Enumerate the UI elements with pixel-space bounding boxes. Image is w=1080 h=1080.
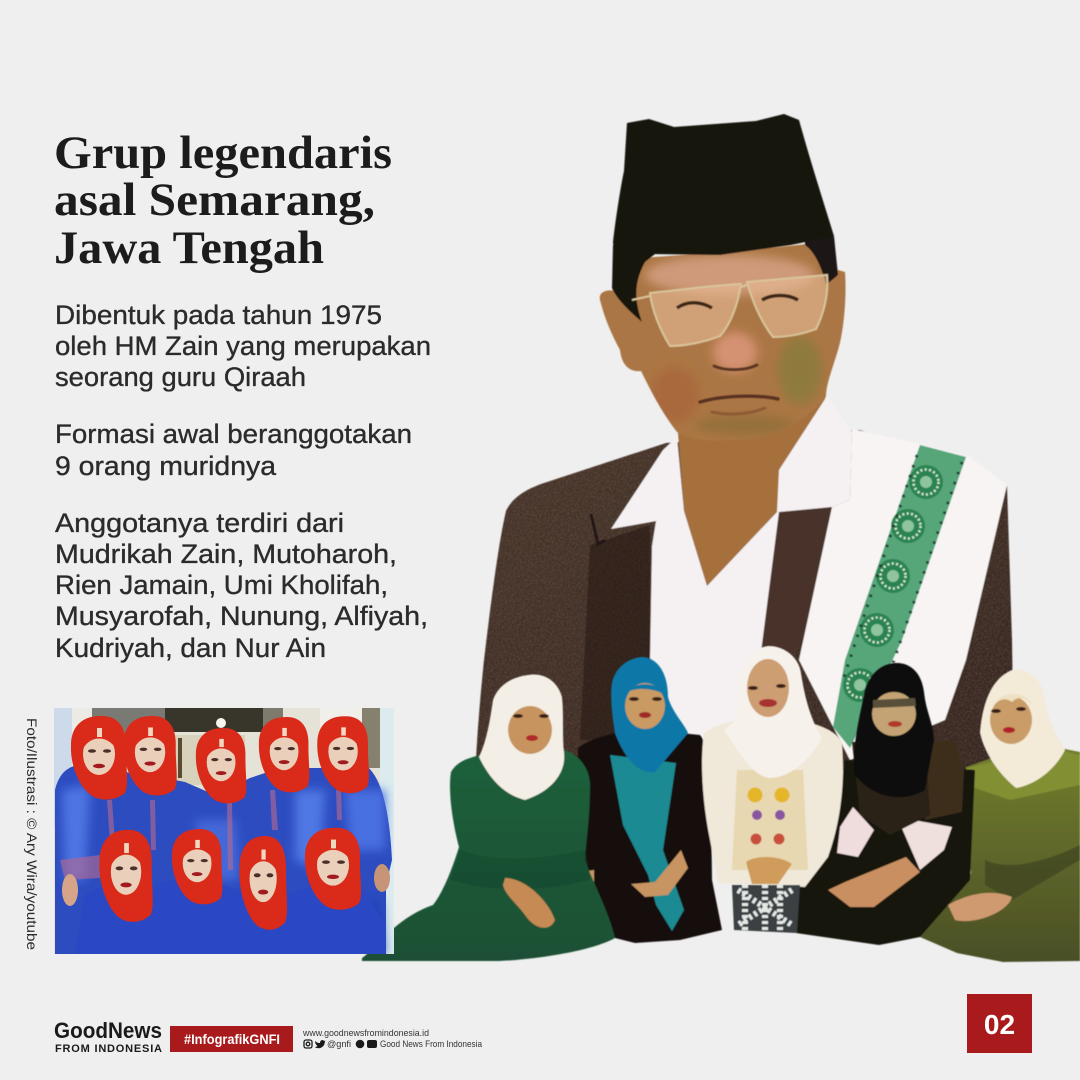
illustration: man with black cap, glasses, brown jacket and white sash <box>470 114 1020 785</box>
shirt and collar <box>611 396 852 760</box>
icon: facebook <box>356 1040 364 1048</box>
hashtag badge <box>170 1026 293 1052</box>
page number badge: 02 <box>984 1009 1015 1040</box>
text block: members: Kudriyah, dan Nur Ain <box>55 633 326 663</box>
batik skirt <box>732 885 800 933</box>
woman 1: green dress with white scarf <box>362 674 615 961</box>
icon: youtube <box>367 1040 377 1048</box>
illustration: five seated women in front of the man <box>362 646 1080 962</box>
icon: twitter <box>315 1040 326 1048</box>
patterned bodice <box>852 740 930 835</box>
footer contact details: @gnfi <box>327 1039 351 1050</box>
face shading <box>645 255 822 435</box>
embroidery <box>732 770 808 870</box>
blue dresses <box>55 765 392 954</box>
text block: members: Mudrikah Zain, Mutoharoh, <box>55 539 397 569</box>
title: asal Semarang, <box>54 174 375 226</box>
embroidery <box>60 790 342 880</box>
jacket grain <box>476 444 1012 768</box>
text block: first formation <box>55 419 412 481</box>
icon: instagram <box>304 1040 312 1048</box>
photo credit: Foto/Ilustrasi : © Ary Wira/youtube <box>24 718 40 950</box>
title: Jawa Tengah <box>54 222 324 274</box>
text block: members: Musyarofah, Nunung, Alfiyah, <box>55 601 428 631</box>
arm and hand <box>828 857 920 907</box>
footer logo: GoodNews From Indonesia: FROM INDONESIA <box>55 1043 162 1055</box>
glasses <box>632 275 827 346</box>
nose and mouth <box>700 365 778 414</box>
jacket <box>476 430 1014 780</box>
photo background <box>54 708 394 954</box>
dress highlights <box>62 785 385 954</box>
footer contact details <box>302 1028 483 1050</box>
text block: first formation: 9 orang muridnya <box>55 451 277 481</box>
text block: members: Anggotanya terdiri dari <box>55 508 344 538</box>
footer logo: GoodNews From Indonesia <box>54 1018 162 1055</box>
brown lapel strip <box>760 507 832 665</box>
woman 5: olive dress <box>920 670 1080 962</box>
woman 4: black hijab <box>796 663 975 945</box>
text block: first formation: Formasi awal beranggotakan <box>55 419 412 449</box>
hands <box>62 874 78 906</box>
footer contact details: Good News From Indonesia <box>380 1039 483 1050</box>
footer contact details: www.goodnewsfromindonesia.id <box>302 1028 429 1039</box>
title: Grup legendaris <box>54 127 392 179</box>
text block: members <box>55 508 428 663</box>
hashtag badge: #InfografikGNFI <box>184 1032 280 1047</box>
title <box>54 127 392 274</box>
white sash <box>799 429 1007 760</box>
woman 3: cream embroidered dress <box>702 646 843 933</box>
hair sides <box>612 245 660 322</box>
front row bodies <box>90 900 384 954</box>
woman 2: blue scarf and black outfit <box>578 657 722 943</box>
text block: founding <box>55 300 431 392</box>
patterned sleeve <box>925 740 964 820</box>
footer logo: GoodNews From Indonesia: GoodNews <box>54 1018 162 1043</box>
black cap <box>613 114 834 257</box>
face <box>600 243 846 441</box>
front row heads <box>99 828 361 930</box>
neck <box>677 396 826 586</box>
jacket shading <box>580 525 650 740</box>
green sash band <box>833 445 966 748</box>
left sleeve <box>837 807 874 857</box>
text block: founding: oleh HM Zain yang merupakan <box>55 331 431 361</box>
text block: founding: Dibentuk pada tahun 1975 <box>55 300 382 330</box>
text block: founding: seorang guru Qiraah <box>55 362 306 392</box>
lapel notch <box>591 514 605 544</box>
right sleeve <box>897 817 952 870</box>
page number badge <box>967 994 1032 1053</box>
text block: members: Rien Jamain, Umi Kholifah, <box>55 570 388 600</box>
eyes <box>677 296 798 308</box>
back row heads <box>71 716 369 803</box>
small photo: nine members in blue and red <box>54 708 394 954</box>
